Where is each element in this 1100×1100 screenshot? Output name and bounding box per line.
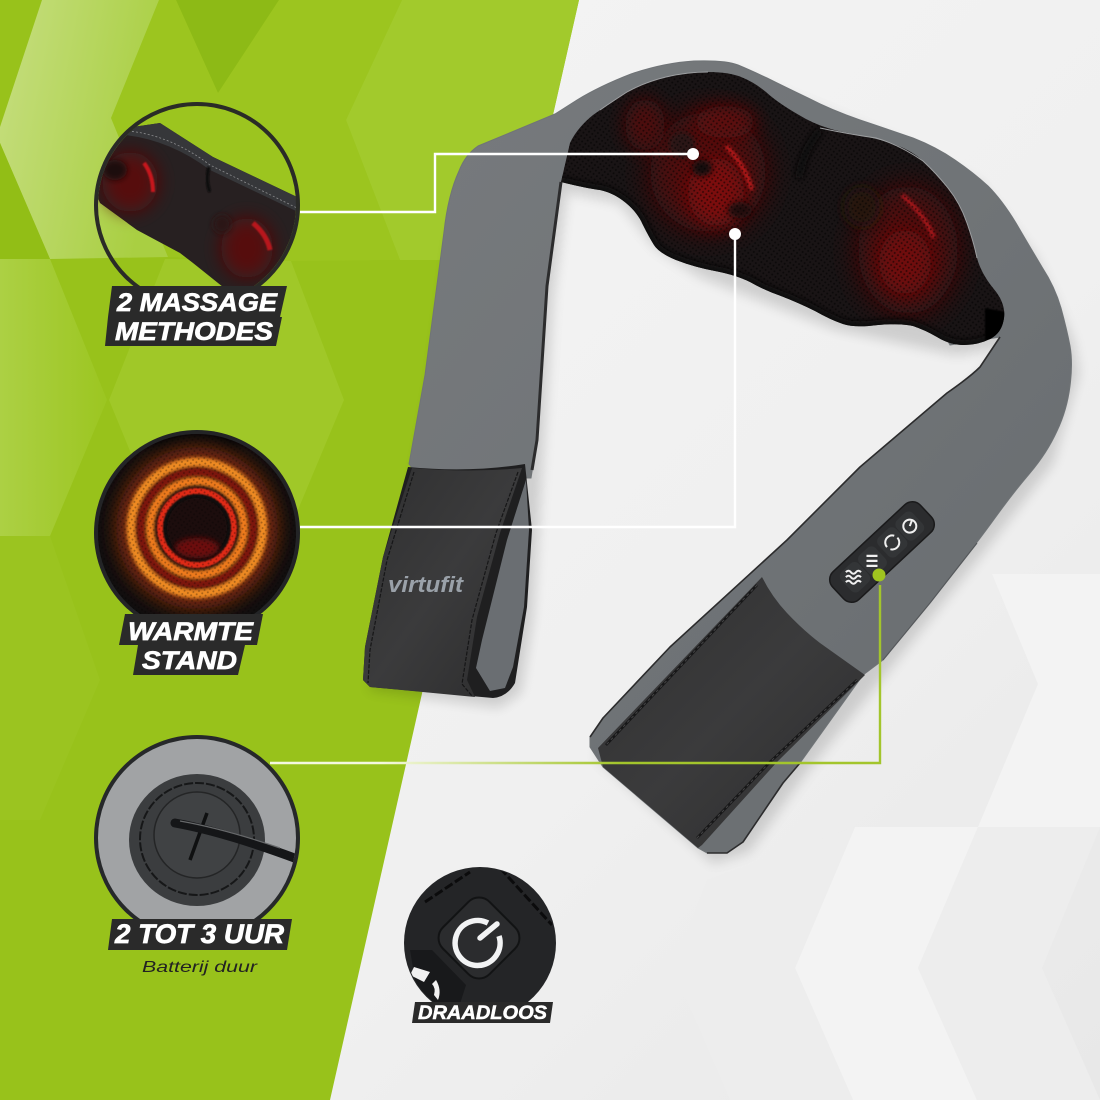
button: mode [856, 544, 889, 578]
mesh massage area [561, 72, 1004, 345]
connector lines [270, 154, 880, 763]
label: draadloos: DRAADLOOS [418, 1003, 547, 1024]
power icon [455, 920, 500, 965]
button: power [893, 509, 927, 543]
brand logo: virtufit [388, 572, 465, 597]
label: warmte stand: STAND [142, 647, 237, 675]
button: vibration [837, 560, 873, 595]
product: neck massager [363, 50, 1079, 863]
button: rotate [875, 525, 910, 560]
strap body [409, 61, 1072, 853]
background: green diagonal panel [0, 0, 579, 1100]
label: 2 tot 3 uur: 2 TOT 3 UUR [114, 919, 285, 949]
label: warmte stand [119, 614, 263, 675]
label: warmte stand: WARMTE [128, 618, 254, 646]
left pocket face [363, 468, 522, 697]
product shadow [369, 70, 1079, 863]
left pocket side panel [476, 480, 529, 691]
right pocket [598, 577, 865, 848]
left pocket [363, 464, 532, 698]
strap edges [532, 182, 1000, 853]
circle: 2 massage methodes [94, 102, 300, 286]
circle: draadloos [404, 867, 556, 1002]
mesh seam [600, 72, 977, 258]
text: batterij duur: Batterij duur [142, 959, 258, 976]
connector dots [687, 148, 886, 582]
label: 2 massage methodes: 2 MASSAGE [116, 289, 278, 317]
control panel [825, 497, 939, 607]
label: 2 massage methodes [105, 286, 287, 346]
circle: warmte stand [94, 430, 300, 614]
label: 2 massage methodes: METHODES [115, 318, 273, 346]
circle: batterij [95, 736, 300, 940]
